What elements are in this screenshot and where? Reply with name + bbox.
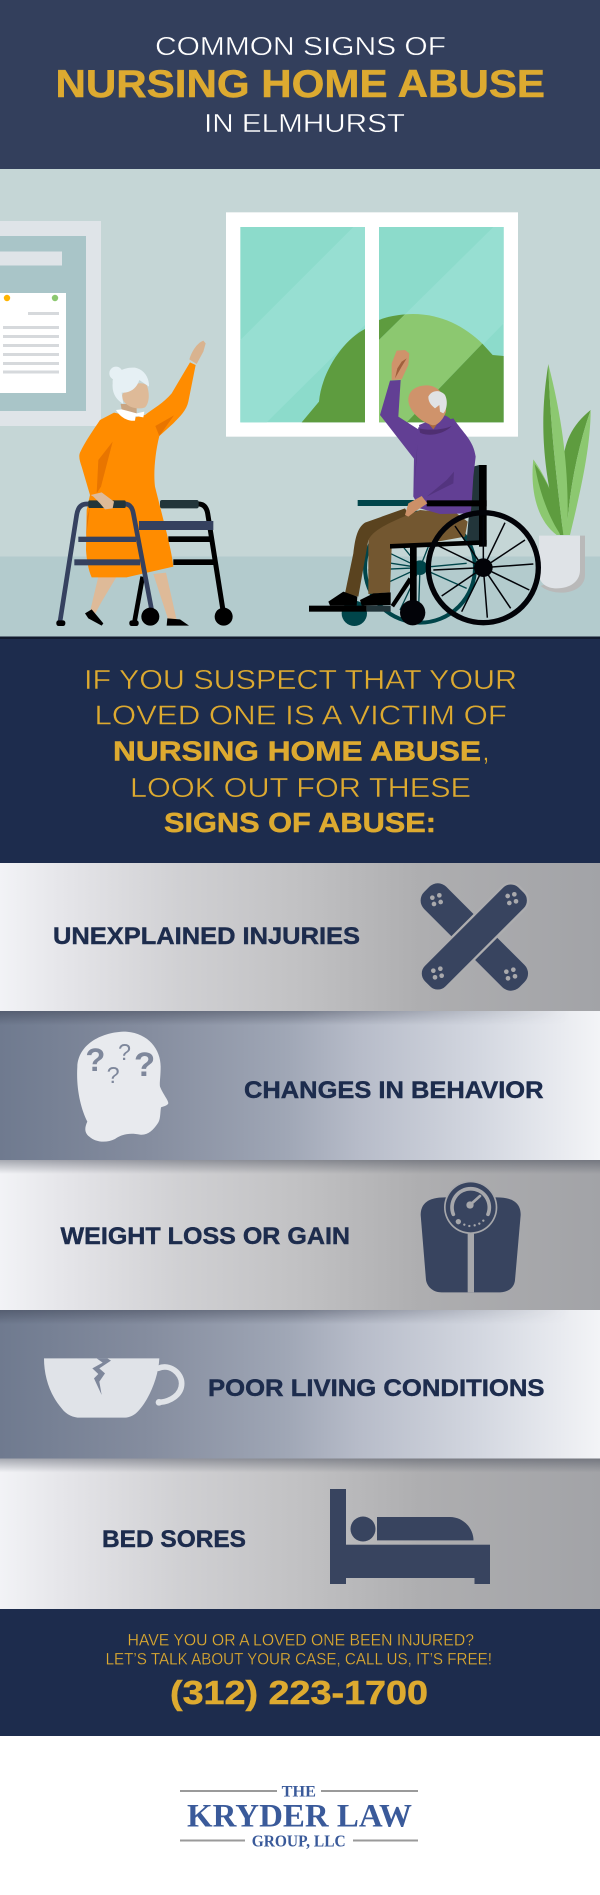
front walker frame xyxy=(56,492,213,626)
head and collar xyxy=(408,385,453,435)
panel: poor living conditions xyxy=(0,1310,600,1458)
intro line 3 comma: , xyxy=(482,736,490,766)
panel: intro statement xyxy=(0,639,600,863)
icon: head with question marks: ? xyxy=(134,1046,155,1084)
hand on knee xyxy=(405,496,427,517)
front wheel xyxy=(428,513,538,623)
intro line 2: LOVED ONE IS A VICTIM OF xyxy=(94,700,507,730)
label: BED SORES xyxy=(102,1526,246,1553)
title line: in elmhurst: IN ELMHURST xyxy=(204,108,405,138)
logo: group llc: GROUP, LLC xyxy=(252,1832,346,1851)
rear wheel xyxy=(365,513,475,623)
shoes xyxy=(328,592,391,606)
intro line 4: LOOK OUT FOR THESE xyxy=(130,772,471,803)
plant in pot xyxy=(533,364,591,593)
logo rules xyxy=(180,1790,418,1842)
logo: the: THE xyxy=(282,1784,316,1800)
icon: head with question marks: ? xyxy=(118,1039,131,1065)
panel: changes in behavior xyxy=(0,1011,600,1160)
panel: footer logo xyxy=(0,1736,600,1895)
trousers xyxy=(345,508,468,597)
wheelchair frame xyxy=(309,500,487,625)
label: POOR LIVING CONDITIONS xyxy=(208,1375,544,1402)
label: WEIGHT LOSS OR GAIN xyxy=(60,1223,350,1250)
icon: crossed bandages xyxy=(416,878,533,996)
window with hills xyxy=(226,212,518,437)
panel: weight loss or gain xyxy=(0,1160,600,1310)
raised hand xyxy=(189,341,206,364)
notice board xyxy=(0,221,101,426)
panel: bed sores xyxy=(0,1458,600,1609)
icon: head with question marks xyxy=(77,1032,168,1142)
legs and shoes xyxy=(85,573,189,626)
intro line 3: NURSING HOME ABUSE xyxy=(113,736,481,766)
label: CHANGES IN BEHAVIOR xyxy=(244,1077,544,1104)
logo: kryder law: KRYDER LAW xyxy=(187,1799,412,1835)
intro line 5: SIGNS OF ABUSE: xyxy=(164,807,436,838)
icon: bathroom scale xyxy=(421,1181,521,1292)
woman with walker xyxy=(56,341,233,626)
purple sweater xyxy=(380,380,476,514)
intro line 1: IF YOU SUSPECT THAT YOUR xyxy=(84,664,517,695)
seat back xyxy=(467,465,479,543)
cta line 2: LET’S TALK ABOUT YOUR CASE, CALL US, IT’S FREE! xyxy=(106,1651,492,1669)
icon: cracked cup xyxy=(44,1358,182,1418)
back walker frame xyxy=(129,500,233,626)
man in wheelchair xyxy=(309,350,538,626)
icon: head with question marks: ? xyxy=(107,1062,120,1088)
icon: head with question marks: ? xyxy=(85,1041,105,1078)
panel: header xyxy=(0,0,600,169)
panel: illustration scene xyxy=(0,169,600,640)
panel: unexplained injuries xyxy=(0,863,600,1011)
panel: call to action xyxy=(0,1609,600,1736)
cta line 1: HAVE YOU OR A LOVED ONE BEEN INJURED? xyxy=(128,1632,474,1650)
title line: common signs of: COMMON SIGNS OF xyxy=(155,31,446,61)
label: UNEXPLAINED INJURIES xyxy=(53,923,360,950)
phone number: (312) 223-1700 xyxy=(170,1674,428,1711)
orange dress xyxy=(79,362,196,577)
icon: person in bed xyxy=(330,1489,490,1584)
head and hair xyxy=(109,367,149,421)
title line: nursing home abuse: NURSING HOME ABUSE xyxy=(56,63,545,106)
raised hand xyxy=(392,350,409,380)
